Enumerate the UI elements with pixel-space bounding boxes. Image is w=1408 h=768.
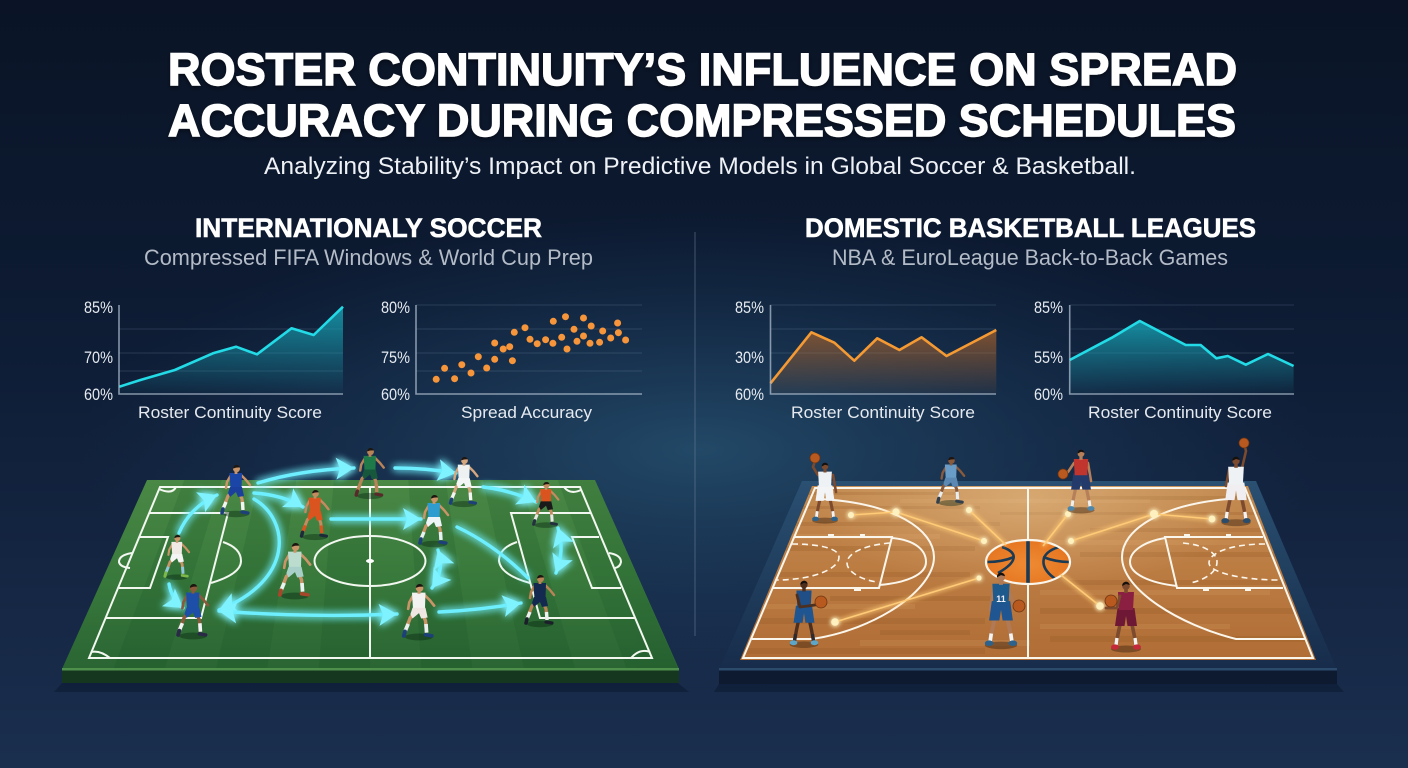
chart: basketball roster continuity teal area: 60%	[1034, 385, 1063, 404]
chart: soccer spread accuracy scatter: 80%	[381, 298, 410, 317]
chart: soccer spread accuracy scatter: 75%	[381, 348, 410, 367]
panel: basketball court	[714, 438, 1344, 692]
player: navy forward	[526, 575, 554, 627]
chart: basketball roster continuity teal area: 55%	[1034, 348, 1063, 367]
panel divider	[694, 232, 696, 636]
player: white and red midfielder	[404, 584, 434, 640]
player: green winger	[356, 448, 384, 499]
subheading: basketball: NBA & EuroLeague Back-to-Back Games	[832, 245, 1228, 270]
player: white jersey with raised ball	[810, 453, 838, 524]
player: number 11: 11	[996, 594, 1006, 604]
player: blue midfielder	[222, 465, 250, 517]
heading: international soccer	[144, 213, 593, 270]
court markings	[743, 488, 1313, 658]
chart: basketball roster continuity orange area: 85%	[735, 298, 764, 317]
chart: soccer roster continuity area: 60%	[84, 385, 113, 404]
chart: soccer roster continuity area: Roster Continuity Score	[138, 403, 322, 422]
player: pale green midfielder	[280, 543, 310, 599]
subheading: soccer: Compressed FIFA Windows & World Cup Prep	[144, 245, 593, 270]
heading: domestic basketball: DOMESTIC BASKETBALL LEAGUES	[805, 213, 1256, 243]
player: blue jersey dribbling left	[790, 581, 827, 648]
chart: soccer roster continuity area	[84, 298, 343, 422]
player: orange and black forward	[534, 482, 558, 528]
player: white jersey shooting	[1221, 438, 1251, 526]
chart: basketball roster continuity teal area: 85%	[1034, 298, 1063, 317]
chart: basketball roster continuity orange area: 30%	[735, 348, 764, 367]
player: light blue guard	[938, 457, 964, 506]
chart: basketball roster continuity teal area	[1034, 298, 1294, 422]
title: ROSTER CONTINUITY’S INFLUENCE ON SPREAD	[168, 44, 1237, 95]
chart: basketball roster continuity orange area	[735, 298, 996, 422]
player: white forward	[451, 457, 477, 507]
panel: soccer pitch	[54, 448, 689, 692]
player: maroon jersey with ball	[1105, 582, 1141, 652]
chart: soccer spread accuracy scatter: 60%	[381, 385, 410, 404]
title	[168, 44, 1237, 146]
player: blue defender	[178, 584, 208, 639]
player: number 11	[985, 573, 1025, 649]
player: light blue midfielder	[420, 495, 448, 547]
subtitle: Analyzing Stability’s Impact on Predictive Models in Global Soccer & Basketball.	[264, 153, 1136, 180]
chart: soccer spread accuracy scatter	[381, 298, 642, 422]
chart: soccer roster continuity area: 70%	[84, 348, 113, 367]
title: ACCURACY DURING COMPRESSED SCHEDULES	[168, 95, 1236, 146]
chart: soccer roster continuity area: 85%	[84, 298, 113, 317]
heading: international soccer: INTERNATIONALY SOCCER	[195, 213, 542, 243]
glowing connection lines	[831, 507, 1215, 626]
chart: soccer spread accuracy scatter: Spread Accuracy	[461, 403, 593, 422]
chart: basketball roster continuity orange area: 60%	[735, 385, 764, 404]
wood planks	[756, 486, 1308, 646]
heading: domestic basketball	[805, 213, 1256, 270]
player: white defender	[165, 535, 189, 580]
player: orange midfielder	[302, 490, 328, 540]
player: red jersey with ball	[1058, 450, 1094, 513]
passing arrows	[169, 468, 561, 615]
center court basketball	[986, 538, 1070, 586]
pitch markings	[89, 487, 652, 658]
chart: basketball roster continuity teal area: Roster Continuity Score	[1088, 403, 1272, 422]
chart: basketball roster continuity orange area: Roster Continuity Score	[791, 403, 975, 422]
